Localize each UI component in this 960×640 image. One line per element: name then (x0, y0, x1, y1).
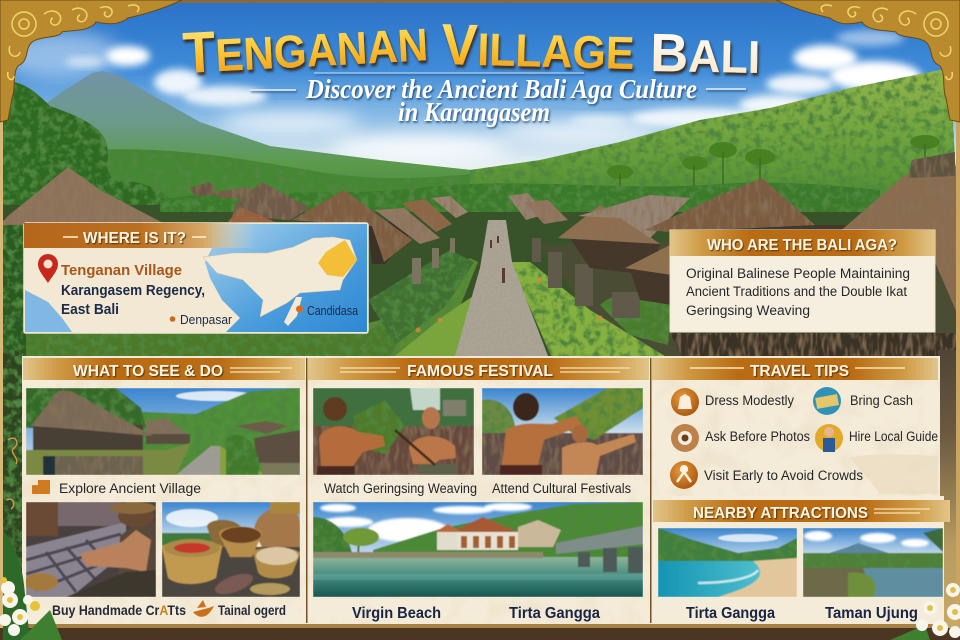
mainland (100, 248, 240, 332)
label: explore ancient village: Explore Ancient Village (59, 481, 201, 496)
panel: famous festival (308, 358, 649, 622)
photo: taman ujung (803, 528, 943, 597)
label: virgin beach: Virgin Beach (352, 605, 441, 622)
terrace right (670, 333, 960, 360)
description (686, 266, 910, 318)
photo: handmade crafts (162, 502, 300, 597)
left edge foliage (0, 220, 26, 360)
flowers: bottom left (0, 530, 62, 640)
heading: WHERE IS IT? (83, 230, 186, 247)
region name (61, 283, 205, 318)
heading: NEARBY ATTRACTIONS (693, 505, 868, 522)
trees left (0, 81, 190, 240)
subtitle: Discover the Ancient Bali Aga Culture (305, 74, 697, 104)
label: buy handmade crafts: Buy Handmade CrATts (52, 603, 186, 618)
photo: festival two (482, 388, 643, 475)
map label: Candidasa: Candidasa (307, 304, 358, 318)
peninsula (284, 297, 302, 326)
panel: what to see and do (23, 358, 305, 618)
heading: TRAVEL TIPS (750, 363, 849, 380)
bushes right (600, 294, 672, 345)
right side grounds (540, 235, 960, 360)
header band (24, 223, 256, 248)
corner ornament: top left (0, 0, 182, 122)
shrines right (532, 238, 640, 318)
sea (205, 224, 367, 332)
label: tirta gangga: Tirta Gangga (509, 605, 600, 622)
house walls right (570, 225, 850, 305)
background landscape (0, 0, 960, 360)
title: BALI (650, 23, 761, 85)
icon: village (32, 480, 50, 494)
left side bushes (0, 290, 430, 356)
photo: water palace (313, 502, 643, 597)
subtitle: in Karangasem (398, 97, 550, 127)
label: taman ujung: Taman Ujung (825, 605, 918, 622)
left thatched hut (0, 167, 163, 225)
right row of houses (508, 152, 960, 320)
bali island (203, 237, 357, 317)
people on road (490, 236, 505, 283)
road-side flowers (416, 278, 602, 332)
lower info board (22, 356, 940, 628)
left vine border (3, 350, 22, 570)
tip: dress modestly (671, 388, 794, 416)
title: VILLAGE (441, 12, 635, 82)
heading: WHO ARE THE BALI AGA? (707, 237, 897, 254)
header band (670, 230, 935, 256)
title: TENGANAN (181, 8, 429, 86)
right stone and vine border (938, 350, 956, 628)
heading: WHAT TO SEE & DO (73, 363, 223, 380)
subtitle (250, 73, 746, 127)
label: tirta gangga: Tirta Gangga (686, 605, 775, 622)
photo: ancient village (26, 388, 300, 475)
tip: dress modestly: Dress Modestly (705, 393, 794, 408)
heading: FAMOUS FESTIVAL (407, 363, 553, 380)
grass right (510, 262, 668, 358)
stone road (455, 220, 548, 356)
region name: East Bali (61, 302, 119, 318)
description: Ancient Traditions and the Double Ikat (686, 284, 907, 299)
map label: Denpasar: Denpasar (180, 313, 232, 327)
icon: location pin (38, 254, 58, 283)
header band (652, 358, 938, 380)
sky (0, 0, 960, 175)
tip: ask before photos (671, 424, 810, 452)
header band (23, 358, 305, 380)
tip: visit early (670, 461, 863, 489)
forest left valley (70, 149, 500, 240)
panel: where is it (24, 223, 368, 333)
volcano (0, 71, 490, 240)
panel: who are the bali aga (670, 230, 935, 332)
header band (653, 500, 950, 522)
shrines left (412, 238, 455, 284)
tip: bring cash (813, 387, 913, 415)
clouds (0, 30, 921, 160)
photo: weaving (26, 502, 156, 597)
title (181, 8, 761, 86)
label: tainal ogerd: Tainal ogerd (218, 603, 286, 618)
photo: tirta gangga beach (658, 528, 797, 597)
description: Geringsing Weaving (686, 303, 810, 318)
description: Original Balinese People Maintaining (686, 266, 910, 281)
tip: hire local guide: Hire Local Guide (849, 429, 938, 444)
house walls left (296, 222, 420, 264)
bottom dark strip (0, 628, 960, 640)
photo: festival one (313, 388, 474, 475)
label: attend cultural festivals: Attend Cultural Festivals (492, 481, 631, 496)
tip: visit early: Visit Early to Avoid Crowds (704, 468, 863, 483)
region name: Karangasem Regency, (61, 283, 205, 299)
west sea (25, 290, 72, 332)
header band (308, 358, 649, 380)
panel: travel tips (652, 358, 938, 494)
forest strip mid (160, 183, 880, 212)
palms right (607, 135, 940, 195)
icon: boat (193, 600, 214, 617)
tip: bring cash: Bring Cash (850, 393, 913, 408)
card base (24, 223, 368, 333)
tip: hire local guide (815, 424, 938, 452)
place name: Tenganan Village (61, 262, 182, 279)
grass left (240, 258, 478, 356)
label: watch geringsing weaving: Watch Geringsing Weaving (324, 481, 477, 496)
left row of houses (190, 182, 468, 262)
decorative scroll (850, 454, 938, 494)
tip: ask before photos: Ask Before Photos (705, 429, 810, 444)
flowers: bottom right (890, 583, 960, 640)
panel: nearby attractions (652, 496, 950, 623)
green hills right (470, 68, 960, 250)
village ground (0, 205, 960, 360)
corner ornament: top right (776, 0, 960, 122)
karangasem region (318, 240, 357, 277)
